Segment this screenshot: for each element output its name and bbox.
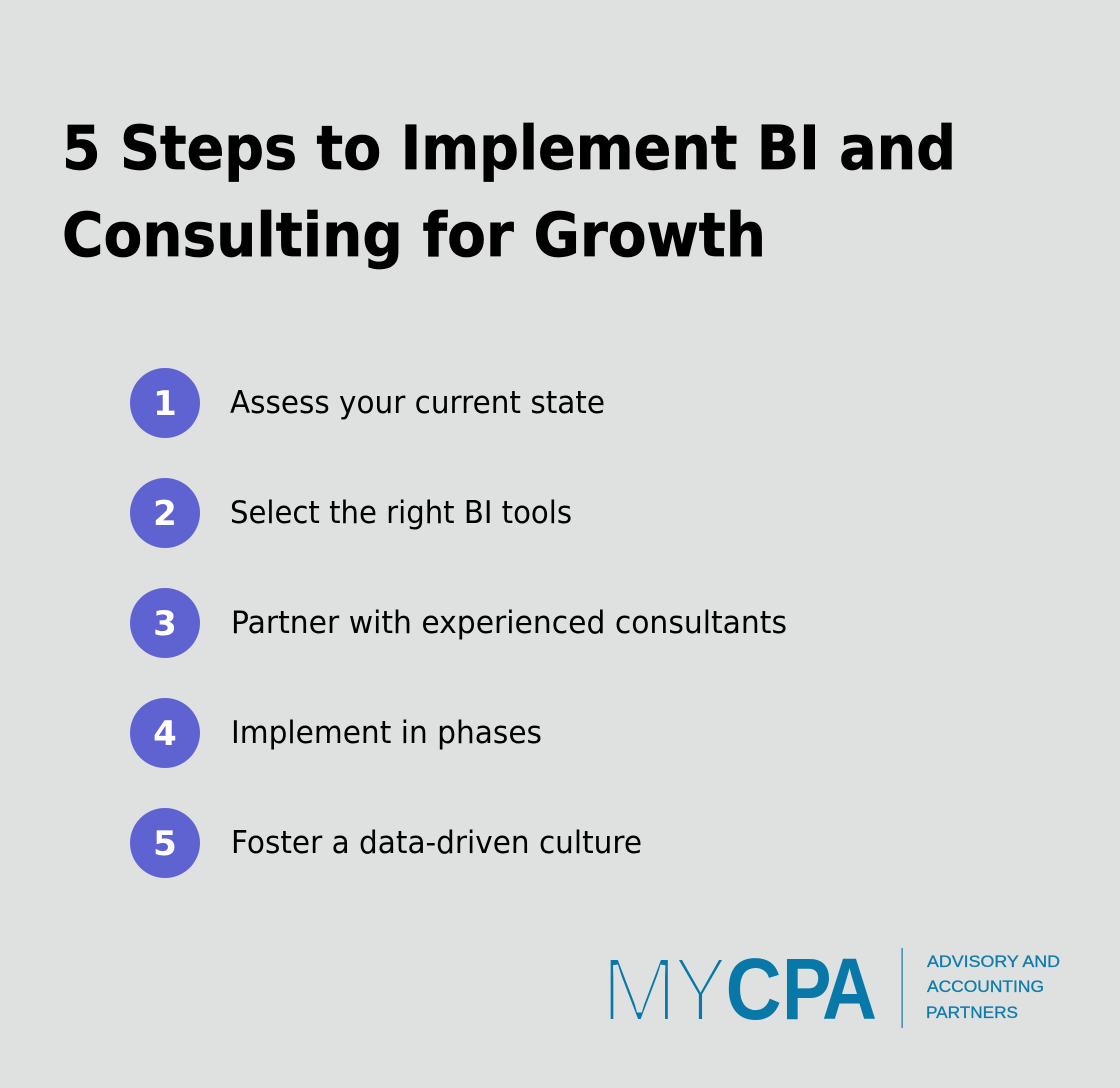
logo tagline <box>926 952 1060 1022</box>
number badge 5: 5 <box>153 824 177 864</box>
logo tagline: ADVISORY AND <box>927 952 1060 971</box>
logo wordmark: CPA: C <box>726 941 782 1038</box>
number badge 2 <box>130 478 200 548</box>
number badge 3 <box>130 588 200 658</box>
number badge 5 <box>130 808 200 878</box>
number badge 4 <box>130 698 200 768</box>
logo wordmark: MY: M <box>600 938 678 1042</box>
step 1 <box>130 368 605 438</box>
logo wordmark: MY <box>600 938 728 1042</box>
number badge 2: 2 <box>153 494 177 534</box>
step 2 <box>130 478 572 548</box>
logo tagline: PARTNERS <box>926 1003 1018 1022</box>
step 4 <box>130 698 542 768</box>
number badge 1: 1 <box>153 384 177 424</box>
logo <box>600 938 1060 1042</box>
step 5 label: Foster a data-driven culture <box>231 825 642 861</box>
logo wordmark: CPA: P <box>782 941 832 1038</box>
step 3 label: Partner with experienced consultants <box>231 605 787 641</box>
title <box>62 113 956 271</box>
logo wordmark: CPA <box>726 941 877 1038</box>
logo wordmark: MY: Y <box>673 938 728 1042</box>
number badge 3: 3 <box>153 604 177 644</box>
step 5 <box>130 808 642 878</box>
logo wordmark: CPA: A <box>822 941 877 1038</box>
number badge 4: 4 <box>153 714 177 754</box>
logo tagline: ACCOUNTING <box>927 977 1044 996</box>
logo divider <box>902 948 903 1028</box>
title: Consulting for Growth <box>62 200 766 271</box>
step 2 label: Select the right BI tools <box>230 495 572 531</box>
step 4 label: Implement in phases <box>231 715 542 751</box>
step 1 label: Assess your current state <box>230 385 605 421</box>
title: 5 Steps to Implement BI and <box>62 113 956 184</box>
number badge 1 <box>130 368 200 438</box>
step 3 <box>130 588 787 658</box>
